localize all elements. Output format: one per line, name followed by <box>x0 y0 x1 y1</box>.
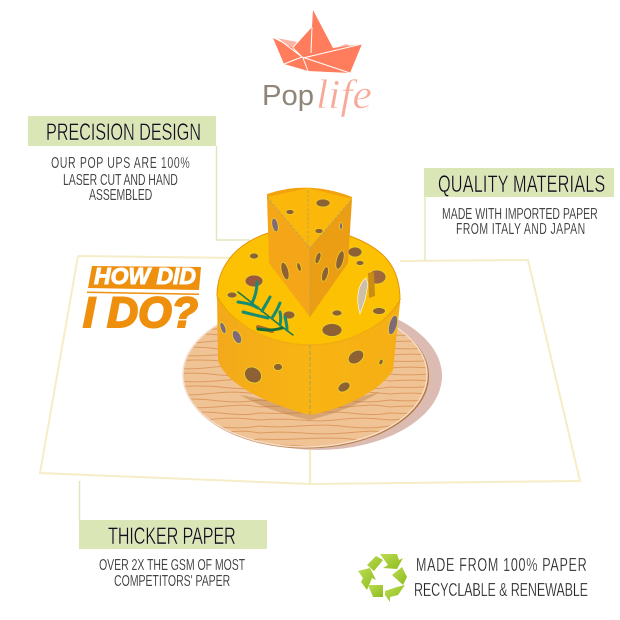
description: COMPETITORS' PAPER <box>114 572 230 590</box>
description <box>99 556 245 590</box>
description: FROM ITALY AND JAPAN <box>456 220 585 238</box>
description: OVER 2X THE GSM OF MOST <box>99 556 245 574</box>
description <box>51 154 190 204</box>
wedge back rim <box>267 188 352 203</box>
top surface holes <box>227 247 386 336</box>
icon: paper mouse <box>358 272 375 314</box>
board rim <box>183 304 429 448</box>
callout: precision design <box>28 116 216 204</box>
text <box>414 556 588 601</box>
cheese top <box>217 233 400 345</box>
large text: I DO? <box>83 289 198 337</box>
description: MADE WITH IMPORTED PAPER <box>442 205 598 223</box>
logo: Poplife <box>262 10 372 117</box>
icon: origami boat <box>273 10 362 73</box>
callout: quality materials <box>424 168 614 238</box>
cheese wedge <box>267 188 352 317</box>
underline <box>87 292 199 295</box>
text: RECYCLABLE & RENEWABLE <box>414 581 588 601</box>
centre fold <box>309 345 311 415</box>
description: LASER CUT AND HAND <box>63 171 178 189</box>
wedge fold lines <box>267 190 352 317</box>
cheese wheel <box>217 188 400 420</box>
side holes <box>219 314 399 394</box>
pop-up card outline <box>40 256 580 484</box>
cheese side <box>217 296 400 415</box>
cheese rim highlight <box>217 298 400 345</box>
description: OUR POP UPS ARE 100% <box>51 154 190 172</box>
logo wordmark <box>262 71 372 117</box>
card text: How did I do <box>83 263 201 337</box>
banner text: HOW DID <box>94 263 196 289</box>
wedge right wall <box>310 199 352 317</box>
description <box>442 205 598 238</box>
heading band <box>424 168 614 197</box>
heading: QUALITY MATERIALS <box>438 171 605 198</box>
wedge left wall <box>267 197 310 317</box>
logo wordmark: life <box>316 71 372 117</box>
icon: recycling symbol <box>358 554 407 602</box>
wedge top <box>267 188 352 248</box>
heading: THICKER PAPER <box>108 523 236 550</box>
text: MADE FROM 100% PAPER <box>416 556 587 576</box>
heading band <box>79 520 267 549</box>
orange banner <box>88 266 201 290</box>
callout: recyclable <box>358 554 588 602</box>
heading: PRECISION DESIGN <box>46 119 201 146</box>
callout: thicker paper <box>79 520 267 590</box>
wooden board <box>183 302 442 450</box>
callout connector lines <box>80 146 425 520</box>
heading band <box>28 116 216 146</box>
board shadow <box>194 302 442 450</box>
wedge holes <box>271 199 346 282</box>
board surface <box>183 303 427 447</box>
logo wordmark: Pop <box>262 80 314 112</box>
cheese shadow <box>240 392 380 420</box>
description: ASSEMBLED <box>89 186 152 204</box>
icon: rosemary sprig <box>238 282 293 335</box>
